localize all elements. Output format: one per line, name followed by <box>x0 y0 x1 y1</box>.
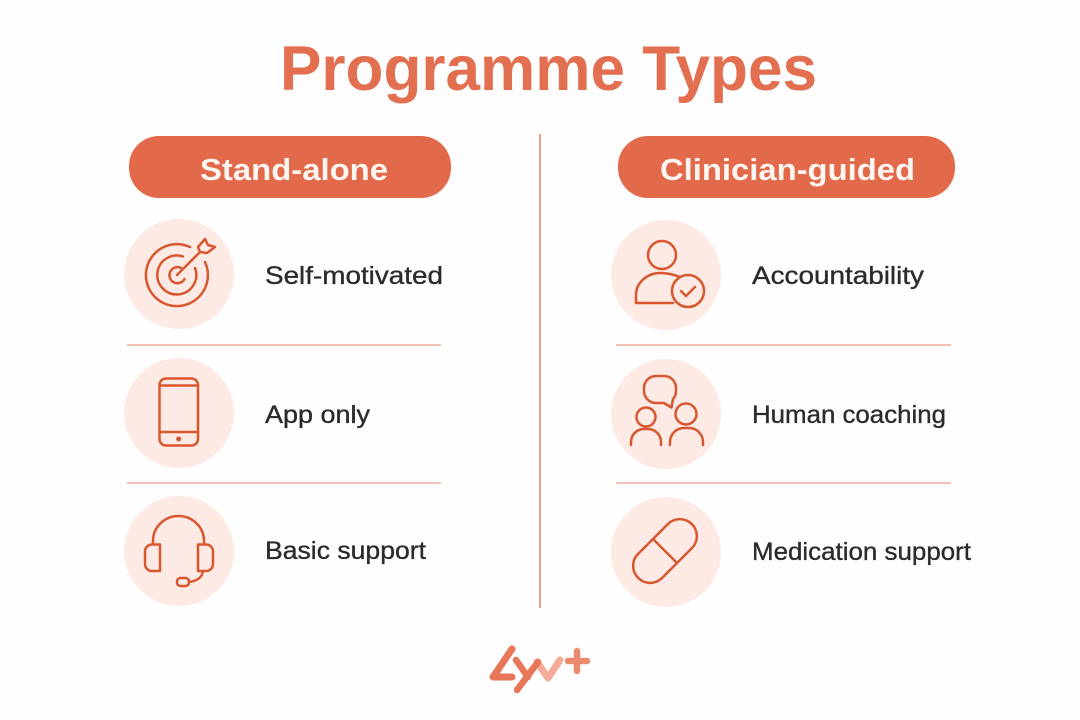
heading pill: clinician-guided <box>618 136 955 198</box>
heading pill: clinician-guided: Clinician-guided <box>660 152 915 187</box>
centre divider <box>539 134 541 608</box>
panel: clinician-guided <box>611 136 971 607</box>
icon: headset <box>145 516 213 586</box>
heading pill: stand-alone <box>129 136 451 198</box>
label: Medication support <box>752 538 971 566</box>
icon: two people with speech bubble <box>631 376 703 445</box>
icon: smartphone <box>160 378 198 446</box>
item: human coaching <box>611 359 946 469</box>
icon: target with arrow <box>146 239 215 306</box>
label: App only <box>265 401 371 429</box>
item: medication support <box>611 497 971 607</box>
item: self-motivated <box>124 219 443 329</box>
label: Self-motivated <box>265 262 443 290</box>
label: Accountability <box>752 262 925 290</box>
heading pill: stand-alone: Stand-alone <box>200 152 388 187</box>
title: Programme Types <box>280 34 817 104</box>
icon: person with check badge <box>636 241 704 307</box>
label: Basic support <box>265 537 426 565</box>
logo <box>493 649 587 690</box>
icon: capsule <box>626 512 704 590</box>
panel: stand-alone <box>124 136 451 606</box>
item: app only <box>124 358 371 468</box>
label: Human coaching <box>752 401 946 429</box>
item: basic support <box>124 496 426 606</box>
item: accountability <box>611 220 925 330</box>
